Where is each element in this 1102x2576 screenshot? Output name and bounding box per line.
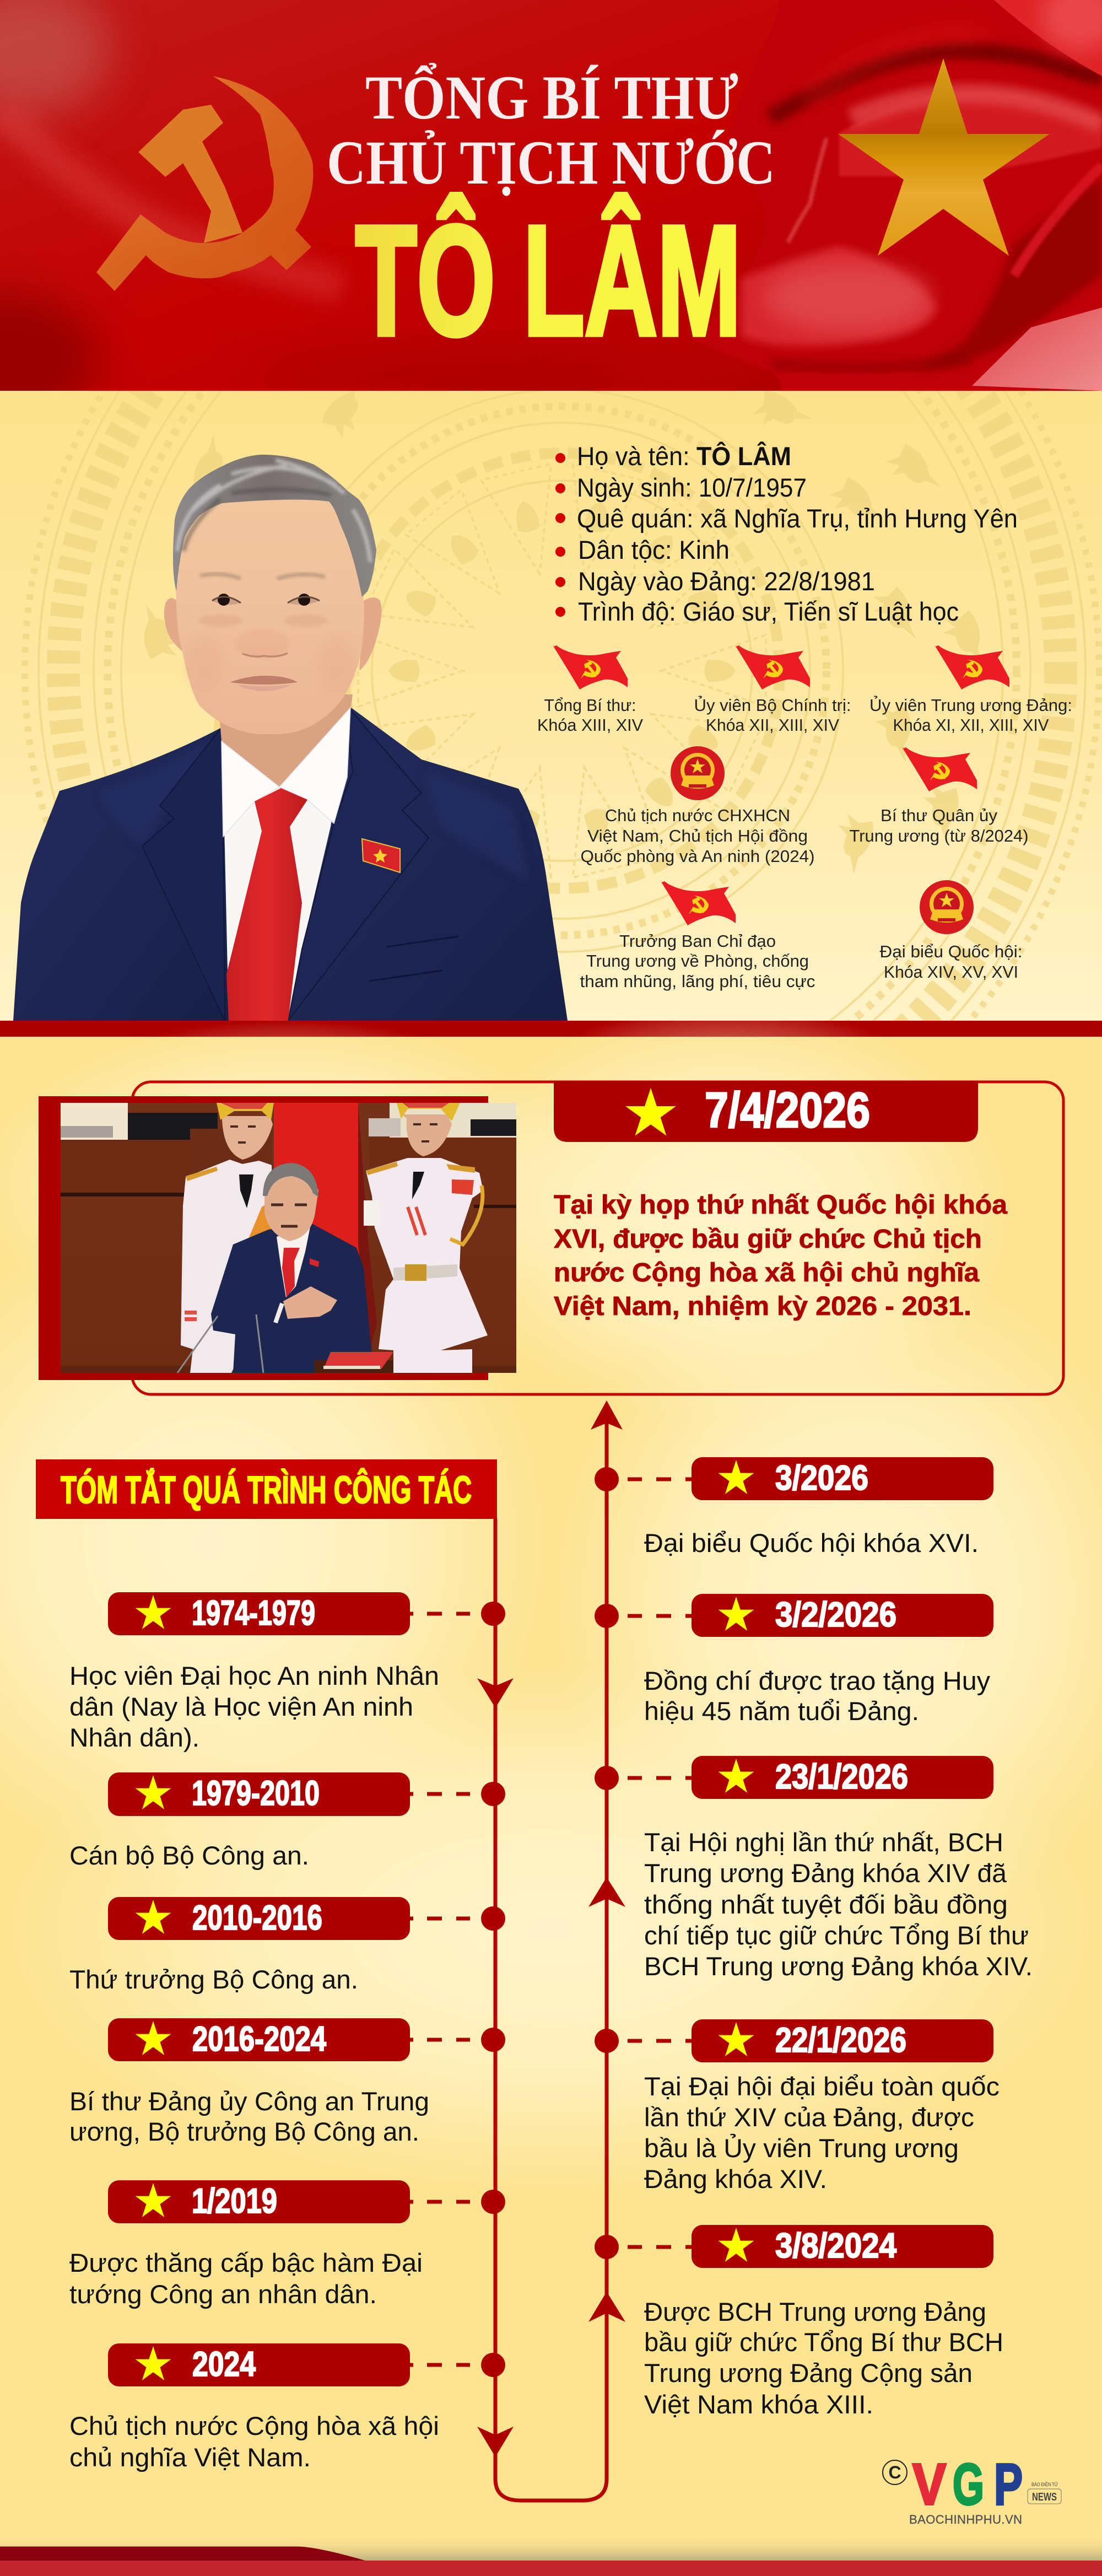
- position: Đại biểu Quốc hội: [879, 880, 1023, 982]
- milestone 1974-1979: dân (Nay là Học viện An ninh: [69, 1692, 413, 1721]
- milestone 22/1/2026: lần thứ XIV của Đảng, được: [644, 2103, 974, 2132]
- position: Chủ tịch nước: Việt Nam, Chủ tịch Hội đồng: [587, 826, 808, 845]
- position: Chủ tịch nước: [581, 746, 814, 866]
- biography facts list: Họ và tên: TÔ LÂM: [577, 441, 791, 471]
- milestone 23/1/2026: Trung ương Đảng khóa XIV đã: [644, 1858, 1007, 1888]
- position: Tổng Bí thư: [537, 644, 643, 735]
- position: Trưởng Ban Chỉ đạo: Trung ương về Phòng, chống: [586, 951, 809, 971]
- photo: left guard: [181, 1103, 274, 1373]
- position: Chủ tịch nước: Chủ tịch nước CHXHCN: [605, 806, 790, 825]
- milestone 23/1/2026: Tại Hội nghị lần thứ nhất, BCH: [644, 1828, 1003, 1857]
- milestone 2016-2024: 2016-2024: [192, 2020, 326, 2058]
- highlight text: XVI, được bầu giữ chức Chủ tịch: [554, 1225, 982, 1254]
- milestone 2016-2024: Bí thư Đảng ủy Công an Trung: [69, 2087, 429, 2116]
- photo: Tô Lâm: [211, 1163, 375, 1373]
- logo: VGP News: G: [953, 2452, 984, 2517]
- date banner 7/4/2026: [554, 1081, 978, 1142]
- position: Ủy viên Bộ Chính trị: [694, 644, 851, 735]
- position: Ủy viên Trung ương Đảng: Ủy viên Trung ương Đảng:: [869, 695, 1072, 715]
- milestone 3/2026: 3/2026: [775, 1459, 868, 1497]
- milestone 1/2019: 1/2019: [192, 2182, 277, 2221]
- milestone 22/1/2026: bầu là Ủy viên Trung ương: [644, 2133, 959, 2163]
- arrow: down upper: [477, 1678, 514, 1708]
- title: TỔNG BÍ THƯ: [365, 63, 738, 132]
- position: Trưởng Ban Chỉ đạo: tham nhũng, lãng phí, tiêu cực: [580, 972, 815, 991]
- milestone 23/1/2026: chí tiếp tục giữ chức Tổng Bí thư: [644, 1921, 1029, 1950]
- portrait: facial features: [185, 574, 356, 692]
- highlight text: Việt Nam, nhiệm kỳ 2026 - 2031.: [554, 1292, 971, 1321]
- logo: VGP News: V: [912, 2452, 946, 2517]
- milestone 2010-2016: Thứ trưởng Bộ Công an.: [69, 1965, 358, 1994]
- milestone 1979-2010: 1979-2010: [192, 1774, 320, 1813]
- milestone 1979-2010: Cán bộ Bộ Công an.: [69, 1841, 309, 1870]
- position: Đại biểu Quốc hội: Khóa XIV, XV, XVI: [884, 962, 1018, 982]
- milestone 2010-2016: [69, 1897, 505, 1994]
- milestone 1974-1979: Nhân dân).: [69, 1723, 199, 1752]
- milestone 2016-2024: ương, Bộ trưởng Bộ Công an.: [69, 2117, 419, 2146]
- position: Ủy viên Bộ Chính trị: Ủy viên Bộ Chính trị:: [694, 695, 851, 715]
- milestone 3/8/2024: 3/8/2024: [775, 2227, 896, 2265]
- position: Tổng Bí thư: Tổng Bí thư:: [544, 696, 636, 715]
- panel: biography background with bronze drum pattern: [0, 391, 1102, 1021]
- milestone 2024: [69, 2343, 505, 2472]
- biography facts list: Quê quán: xã Nghĩa Trụ, tỉnh Hưng Yên: [577, 504, 1018, 533]
- milestone 3/2026: [595, 1457, 993, 1558]
- photo: podium and red book: [314, 1352, 393, 1373]
- portrait: face: [176, 496, 364, 734]
- highlight text: Tại kỳ họp thứ nhất Quốc hội khóa: [554, 1190, 1007, 1220]
- panel: timeline background: [0, 1003, 1102, 2576]
- milestone 23/1/2026: BCH Trung ương Đảng khóa XIV.: [644, 1952, 1033, 1981]
- heading: career summary: TÓM TẮT QUÁ TRÌNH CÔNG TÁC: [61, 1468, 472, 1511]
- biography facts list: Ngày vào Đảng: 22/8/1981: [578, 567, 875, 596]
- heading: career summary: [36, 1459, 497, 1519]
- portrait: neck: [218, 694, 353, 787]
- position: Đại biểu Quốc hội: Đại biểu Quốc hội:: [879, 942, 1023, 961]
- milestone 2016-2024: [69, 2018, 505, 2146]
- portrait: lapel pin: [362, 839, 400, 872]
- milestone 23/1/2026: [595, 1756, 1033, 1981]
- milestone 22/1/2026: 22/1/2026: [775, 2021, 906, 2060]
- logo: VGP News: C: [888, 2462, 901, 2482]
- position: Bí thư Quân ủy Trung ương: Bí thư Quân ủy: [880, 806, 998, 825]
- arrow: up lower: [588, 2292, 625, 2322]
- arrow: up middle: [588, 1877, 625, 1907]
- milestone 23/1/2026: thống nhất tuyệt đối bầu đồng: [644, 1890, 1008, 1919]
- milestone 22/1/2026: Đảng khóa XIV.: [644, 2164, 827, 2194]
- position: Bí thư Quân ủy Trung ương: [850, 746, 1028, 845]
- milestone 1974-1979: Học viên Đại học An ninh Nhân: [69, 1661, 439, 1690]
- title: TÔ LÂM: [355, 193, 741, 368]
- milestone 3/2026: Đại biểu Quốc hội khóa XVI.: [644, 1528, 979, 1558]
- milestone 3/8/2024: [595, 2225, 1003, 2419]
- position: Trưởng Ban Chỉ đạo: Trưởng Ban Chỉ đạo: [619, 931, 776, 951]
- arrow: up top: [591, 1400, 623, 1430]
- icon: gold star: [838, 58, 1050, 256]
- portrait: ears: [164, 597, 381, 671]
- milestone 1/2019: Được thăng cấp bậc hàm Đại: [69, 2248, 423, 2277]
- portrait: collar: [222, 708, 350, 837]
- position: Ủy viên Trung ương Đảng: [869, 644, 1072, 735]
- portrait: tie: [226, 788, 307, 1021]
- logo: VGP News: BAOCHINHPHU.VN: [909, 2513, 1022, 2526]
- timeline line: [495, 1423, 607, 2500]
- photo: right guard: [364, 1103, 488, 1373]
- milestone 3/2/2026: hiệu 45 năm tuổi Đảng.: [644, 1696, 919, 1726]
- milestone 3/2/2026: 3/2/2026: [775, 1596, 896, 1634]
- divider bar: [0, 1021, 1102, 1037]
- date banner 7/4/2026: 7/4/2026: [705, 1083, 870, 1138]
- milestone 2024: 2024: [192, 2345, 256, 2384]
- milestone 1/2019: tướng Công an nhân dân.: [69, 2279, 377, 2309]
- milestone 1974-1979: [69, 1592, 505, 1752]
- photo: red flag: [274, 1103, 359, 1257]
- milestone 22/1/2026: Tại Đại hội đại biểu toàn quốc: [644, 2072, 1000, 2101]
- milestone 3/8/2024: Trung ương Đảng Cộng sản: [644, 2358, 973, 2388]
- highlight text: [554, 1190, 1007, 1321]
- highlight text: nước Cộng hòa xã hội chủ nghĩa: [554, 1258, 979, 1287]
- position: Ủy viên Bộ Chính trị: Khóa XII, XIII, XIV: [706, 715, 839, 735]
- milestone 1/2019: [69, 2180, 505, 2309]
- title: [327, 63, 775, 368]
- milestone 3/8/2024: Việt Nam khóa XIII.: [644, 2390, 873, 2419]
- photo: swearing-in ceremony: [61, 1103, 516, 1373]
- portrait: shirt: [222, 705, 353, 1021]
- portrait: hair: [173, 455, 376, 597]
- milestone 3/2/2026: Đồng chí được trao tặng Huy: [644, 1666, 991, 1695]
- arrow: down lower: [477, 2427, 514, 2457]
- milestone 2010-2016: 2010-2016: [192, 1899, 322, 1937]
- biography facts list: Trình độ: Giáo sư, Tiến sĩ Luật học: [578, 597, 959, 626]
- icon: hammer and sickle: [96, 76, 313, 291]
- highlight box outline: [132, 1082, 1063, 1394]
- photo frame: [39, 1096, 488, 1380]
- milestone 23/1/2026: 23/1/2026: [775, 1758, 908, 1796]
- milestone 3/8/2024: bầu giữ chức Tổng Bí thư BCH: [644, 2327, 1003, 2357]
- logo: VGP News: NEWS: [1032, 2491, 1057, 2503]
- milestone 2024: Chủ tịch nước Cộng hòa xã hội: [69, 2411, 439, 2440]
- logo: VGP News: [883, 2452, 1061, 2526]
- position: Bí thư Quân ủy Trung ương: Trung ương (từ 8/2024): [850, 826, 1028, 845]
- title: CHỦ TỊCH NƯỚC: [327, 128, 775, 197]
- biography facts list: Dân tộc: Kinh: [578, 535, 730, 564]
- logo: VGP News: P: [994, 2452, 1023, 2517]
- milestone 1979-2010: [69, 1772, 505, 1870]
- portrait: suit jacket: [13, 703, 568, 1021]
- logo: VGP News: BÁO ĐIỆN TỬ: [1031, 2481, 1058, 2487]
- biography facts list: [555, 441, 1018, 626]
- biography facts list: Ngày sinh: 10/7/1957: [577, 473, 807, 502]
- milestone 2024: chủ nghĩa Việt Nam.: [69, 2443, 311, 2472]
- position: Chủ tịch nước: Quốc phòng và An ninh (2024): [581, 847, 814, 866]
- milestone 3/2/2026: [595, 1594, 993, 1726]
- position: Ủy viên Trung ương Đảng: Khóa XI, XII, XIII, XIV: [893, 715, 1049, 735]
- portrait of Tô Lâm: [13, 455, 568, 1021]
- panel: header flag banner: [0, 0, 1102, 424]
- milestone 3/8/2024: Được BCH Trung ương Đảng: [644, 2297, 986, 2326]
- position: Trưởng Ban Chỉ đạo: [580, 880, 815, 991]
- footer band: [0, 2535, 1102, 2576]
- milestone 1974-1979: 1974-1979: [192, 1594, 315, 1632]
- milestone 22/1/2026: [595, 2019, 1000, 2194]
- position: Tổng Bí thư: Khóa XIII, XIV: [537, 715, 643, 735]
